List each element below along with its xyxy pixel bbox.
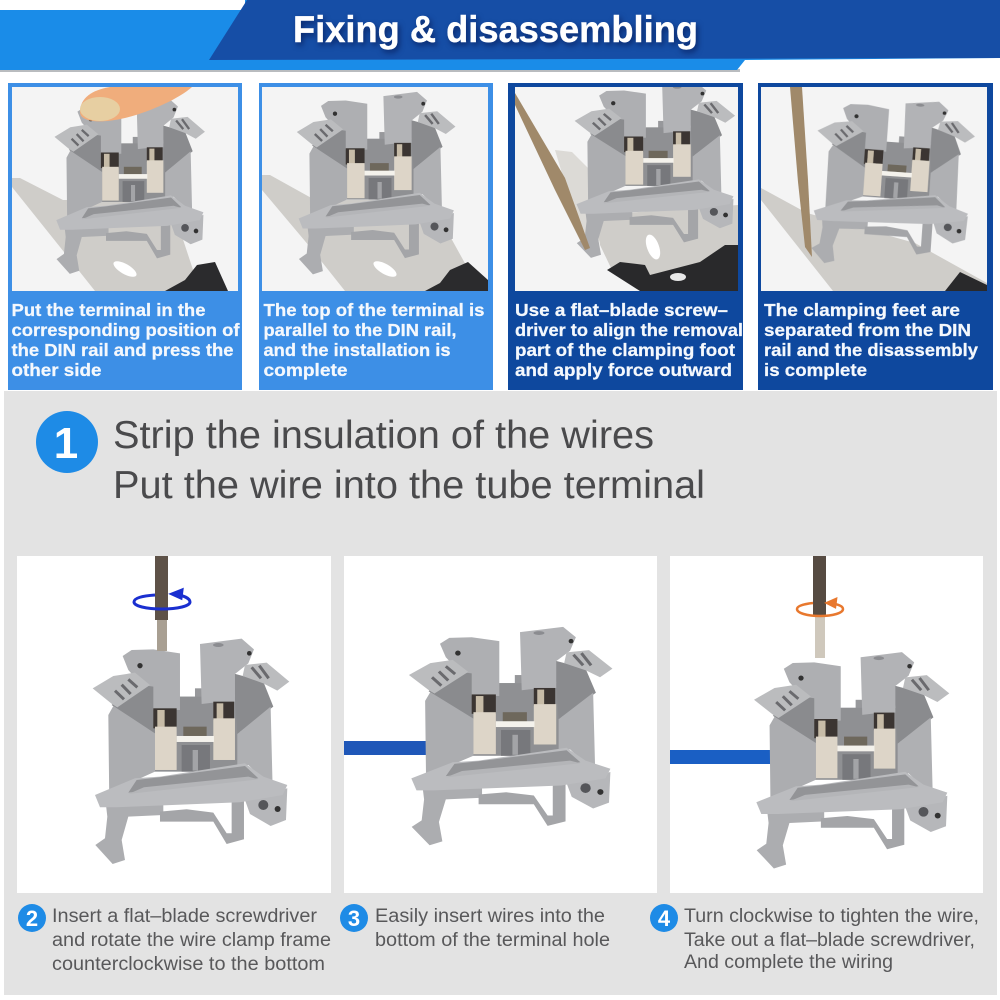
- caption text: part of the clamping foot: [515, 340, 735, 360]
- step 4 caption: And complete the wiring: [684, 952, 893, 973]
- caption text: [12, 300, 240, 380]
- dark blue title ribbon: [209, 0, 1000, 60]
- caption text: and the installation is: [264, 340, 451, 360]
- photo: finger pressing terminal: [12, 87, 228, 291]
- step 4 caption: 4: [658, 906, 671, 931]
- caption text: separated from the DIN: [764, 320, 971, 340]
- caption text: complete: [264, 360, 348, 380]
- caption text: corresponding position of: [12, 320, 240, 340]
- step 2 caption: Insert a flat–blade screwdriver: [52, 906, 318, 927]
- photo: terminal seated on rail: [262, 92, 488, 291]
- photo: inserting the wire: [344, 556, 657, 893]
- title: Fixing & disassembling: [293, 9, 698, 50]
- step 4 caption: Turn clockwise to tighten the wire,: [684, 906, 979, 927]
- step 4 caption: Take out a flat–blade screwdriver,: [684, 930, 975, 951]
- caption text: rail and the disassembly: [764, 340, 978, 360]
- caption text: is complete: [764, 360, 867, 380]
- caption text: [264, 300, 485, 380]
- step 3 caption: [340, 904, 610, 951]
- panel: put terminal on rail: [8, 83, 242, 390]
- caption text: Put the terminal in the: [12, 300, 206, 320]
- panel: installation complete: [259, 83, 493, 390]
- step 3 caption: Easily insert wires into the: [375, 906, 605, 927]
- caption text: The top of the terminal is: [264, 300, 485, 320]
- caption text: driver to align the removal: [515, 320, 743, 340]
- caption text: Use a flat–blade screw–: [515, 300, 728, 320]
- caption text: other side: [12, 360, 102, 380]
- photo: feet separated from rail: [761, 87, 987, 291]
- caption text: [764, 300, 978, 380]
- icon: rotation arrow: [134, 590, 190, 609]
- step 1 badge: 1: [54, 419, 78, 468]
- header banner: [0, 0, 1000, 72]
- step 2 caption: counterclockwise to the bottom: [52, 954, 325, 975]
- step 2 caption: and rotate the wire clamp frame: [52, 930, 331, 951]
- light blue header bar: [0, 0, 1000, 70]
- step 3 caption: bottom of the terminal hole: [375, 930, 610, 951]
- step 4 caption: [650, 904, 979, 973]
- photo: tightening the wire: [670, 556, 983, 893]
- panel: wiring steps: [4, 391, 997, 995]
- photo: screwdriver rotating counterclockwise: [17, 556, 331, 893]
- icon: clockwise rotation arrow: [797, 599, 843, 616]
- caption text: the DIN rail and press the: [12, 340, 234, 360]
- step 1 text: Strip the insulation of the wires: [113, 414, 654, 457]
- caption text: and apply force outward: [515, 360, 732, 380]
- panel: disassembly complete: [758, 83, 993, 390]
- caption text: The clamping feet are: [764, 300, 960, 320]
- step 3 caption: 3: [348, 906, 360, 931]
- panel: align screwdriver: [508, 82, 743, 390]
- step 2 caption: [18, 904, 331, 975]
- step 1 badge: [36, 411, 98, 473]
- caption text: parallel to the DIN rail,: [264, 320, 456, 340]
- caption text: [515, 300, 743, 380]
- step 1 text: [113, 414, 705, 507]
- step 2 caption: 2: [26, 906, 38, 931]
- photo: screwdriver at clamping foot: [515, 82, 738, 291]
- step 1 text: Put the wire into the tube terminal: [113, 464, 705, 507]
